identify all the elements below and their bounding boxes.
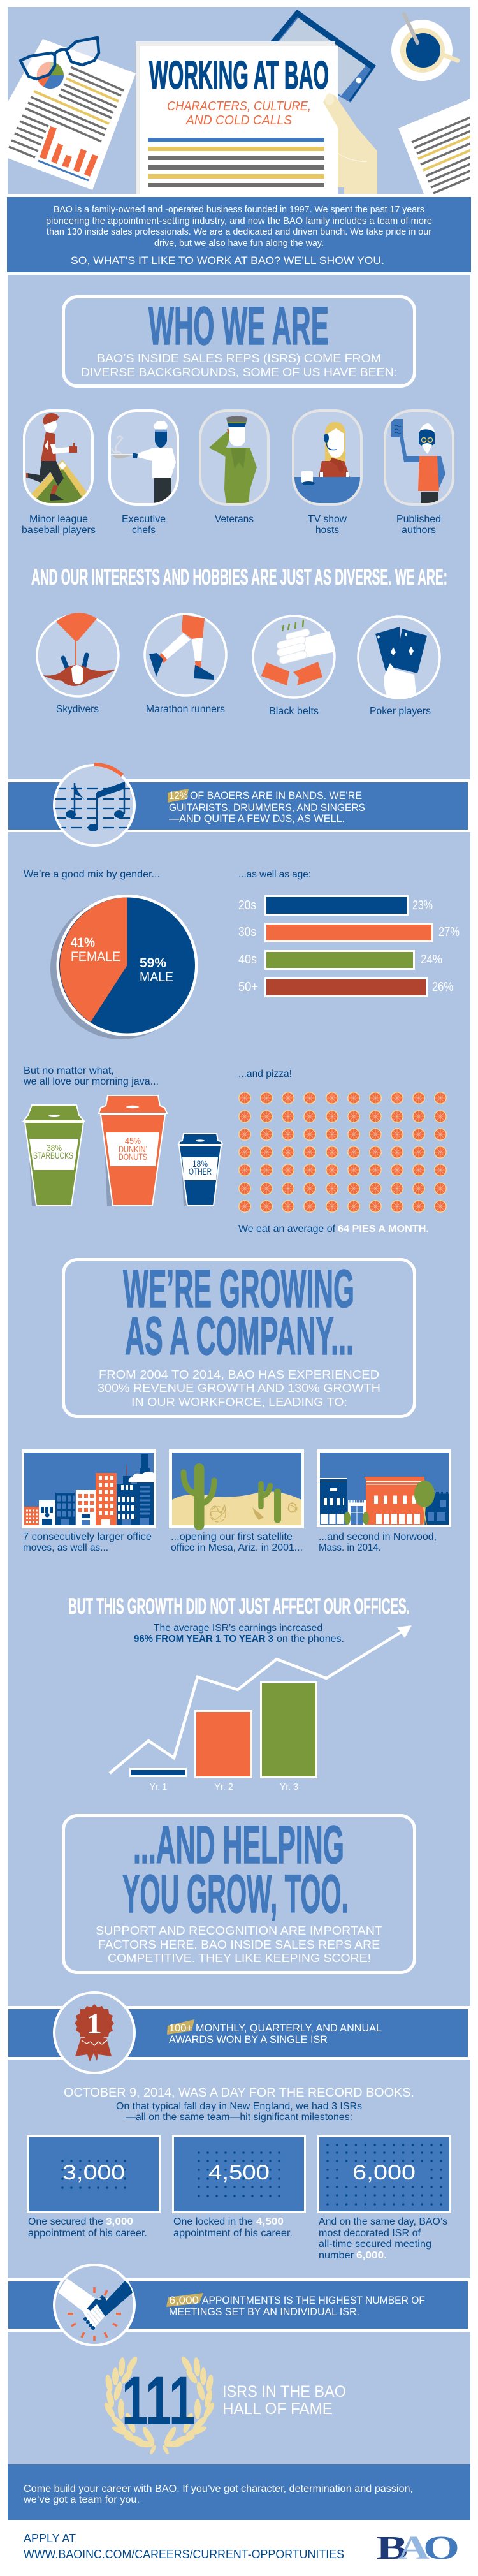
text: record day intro: —all on the same team—hit significant milestones: xyxy=(126,2112,352,2123)
text: hobby labels: Poker players xyxy=(370,706,431,717)
icon: poker cards xyxy=(358,617,440,699)
text: pizza stat: 64 PIES A MONTH. xyxy=(338,1224,429,1234)
bar chart: age: 27% xyxy=(438,925,460,939)
text: hobby labels: Black belts xyxy=(269,706,319,717)
stat highlight xyxy=(168,789,189,803)
text: gender intro: We’re a good mix by gender... xyxy=(24,869,160,880)
icon: coffee cup starbucks 38%: STARBUCKS xyxy=(33,1150,73,1160)
heading subtext: BAO’S INSIDE SALES REPS (ISRS) COME FROM xyxy=(97,351,381,365)
text: earnings xyxy=(134,1623,344,1644)
stat text: GUITARISTS, DRUMMERS, AND SINGERS xyxy=(169,801,365,814)
text: background labels: TV show xyxy=(308,514,347,525)
pie chart: gender: MALE xyxy=(140,970,173,984)
panel: appointments band xyxy=(8,2265,468,2345)
text: background labels: Minor league xyxy=(29,514,88,525)
panel: background hall of fame xyxy=(8,2332,470,2464)
text: background labels: hosts xyxy=(315,525,339,536)
pie chart: gender: 41% xyxy=(71,935,95,950)
intro paragraph: BAO is a family-owned and -operated business founded in 1997. We spent the past 17 years xyxy=(54,205,424,215)
icon: left report page with pie and bar chart xyxy=(0,39,136,190)
panel: background records xyxy=(8,2060,470,2278)
text: milestone captions: One locked in the xyxy=(173,2216,253,2227)
bar chart: age: 20s xyxy=(238,898,256,912)
arrow: rising trend line xyxy=(110,1625,412,1773)
icon: coffee cup dunkin donuts 45%: DONUTS xyxy=(119,1152,147,1162)
text: coffee intro: But no matter what, xyxy=(24,1065,114,1076)
heading subtext: COMPETITIVE. THEY LIKE KEEPING SCORE! xyxy=(108,1951,371,1965)
stat text: MONTHLY, QUARTERLY, AND ANNUAL xyxy=(196,2022,382,2034)
intro paragraph: drive, but we also have fun along the way. xyxy=(154,238,324,249)
subtitle xyxy=(168,101,310,124)
icon: veteran saluting xyxy=(200,411,268,504)
stat text: APPOINTMENTS IS THE HIGHEST NUMBER OF xyxy=(202,2294,425,2306)
text: background labels: chefs xyxy=(132,525,156,536)
text: office captions: office in Mesa, Ariz. in 2001... xyxy=(171,1542,303,1553)
icon: hand holding paper xyxy=(323,93,377,194)
bar chart: age: 26% xyxy=(432,980,453,994)
stat text xyxy=(169,2022,382,2045)
panel: closing band: we’ve got a team for you. xyxy=(23,2494,140,2505)
intro paragraph xyxy=(46,205,432,249)
stat text xyxy=(169,2294,425,2318)
text: hall of fame: HALL OF FAME xyxy=(222,2400,333,2418)
heading subtext: SUPPORT AND RECOGNITION ARE IMPORTANT xyxy=(96,1924,382,1937)
icon: first place ribbon: 1 xyxy=(86,2007,102,2040)
text: hobby labels: Marathon runners xyxy=(146,704,225,715)
heading xyxy=(123,1259,354,1366)
text: background labels: Published xyxy=(396,514,441,525)
panel: growing as a company heading box xyxy=(64,1259,414,1417)
pie chart: gender: 59% xyxy=(140,956,166,970)
text: office captions xyxy=(23,1532,437,1553)
stat text xyxy=(169,789,365,824)
stat text: —AND QUITE A FEW DJS, AS WELL. xyxy=(169,812,345,824)
panel: music band xyxy=(8,765,468,845)
logo: BAO: A xyxy=(398,2530,430,2566)
icon: chef xyxy=(110,411,178,504)
text: background labels: authors xyxy=(402,525,436,536)
text: background labels xyxy=(22,514,441,536)
stat text: 100+ xyxy=(169,2022,192,2034)
intro paragraph: pioneering the appointment-setting industry, and now the BAO family includes a team of more xyxy=(46,216,432,226)
panel: hero desk scene xyxy=(0,7,478,194)
icon: marathon runner xyxy=(145,614,226,696)
big number 111: 111 xyxy=(122,2362,195,2439)
icon: right report page xyxy=(398,99,470,194)
icon: tablet xyxy=(268,10,376,103)
heading subtext xyxy=(81,351,397,379)
bar chart: age: 30s xyxy=(238,925,256,939)
icon: published author xyxy=(385,411,453,506)
heading subtext xyxy=(98,1368,380,1409)
text: coffee intro: we all love our morning java... xyxy=(23,1076,159,1087)
stat text: AWARDS WON BY A SINGLE ISR xyxy=(169,2033,328,2045)
icon: coffee cup dunkin donuts 45% xyxy=(99,1095,167,1206)
logo: BAO: O xyxy=(423,2530,460,2566)
text: office captions: 7 consecutively larger office xyxy=(23,1532,152,1542)
text: earnings: 96% FROM YEAR 1 TO YEAR 3 xyxy=(134,1634,273,1644)
icon: coffee cup dunkin donuts 45%: 45% xyxy=(125,1136,141,1146)
subtitle: AND COLD CALLS xyxy=(185,113,293,128)
panel: 6,000 milestone xyxy=(319,2136,450,2213)
icon: coffee cup xyxy=(391,14,458,81)
panel: intro band xyxy=(7,197,471,272)
text: milestone captions: number xyxy=(319,2250,354,2261)
icon: skydiver xyxy=(37,613,119,696)
bar chart: earnings by year: Yr. 1 xyxy=(150,1782,167,1792)
icon: coffee cup other 18%: 18% xyxy=(192,1159,208,1169)
illustration: Norwood office xyxy=(317,1449,451,1527)
text: milestone captions: all-time secured meeting xyxy=(319,2239,431,2250)
heading: record day: OCTOBER 9, 2014, WAS A DAY FOR THE RECORD BOOKS. xyxy=(64,2086,414,2100)
panel: 4,500 milestone xyxy=(173,2136,305,2213)
bar chart: age: 50+ xyxy=(238,980,258,994)
bar chart: age: 23% xyxy=(412,898,433,912)
text: apply at: WWW.BAOINC.COM/CAREERS/CURRENT-OPPORTUNITIES xyxy=(24,2548,344,2561)
heading subtext: DIVERSE BACKGROUNDS, SOME OF US HAVE BEEN: xyxy=(81,365,397,379)
icon grid: pizzas xyxy=(238,1092,447,1213)
text: background labels: Veterans xyxy=(215,514,254,525)
stat text: 6,000 xyxy=(169,2294,199,2306)
intro paragraph: than 130 inside sales professionals. We are a dedicated and driven bunch. We take pride in our xyxy=(47,227,431,237)
icon: coffee cup other 18% xyxy=(178,1134,222,1206)
text: hobby labels: Skydivers xyxy=(56,704,99,715)
pie chart: gender xyxy=(50,895,198,1039)
text: pizza intro: ...and pizza! xyxy=(238,1069,292,1079)
logo: BAO: B xyxy=(376,2530,408,2566)
bar chart: age: 40s xyxy=(238,953,257,967)
panel: paper stack xyxy=(136,41,338,194)
text: milestone captions: 3,000 xyxy=(106,2216,133,2227)
stat highlight xyxy=(166,2293,203,2307)
text: milestone captions: 6,000. xyxy=(356,2250,387,2261)
intro call line: SO, WHAT’S IT LIKE TO WORK AT BAO? WE’LL SHOW YOU. xyxy=(71,254,384,267)
panel: background stats and growth xyxy=(8,832,470,2006)
icon: black belt breaking board xyxy=(253,616,335,698)
heading xyxy=(122,1815,349,1924)
icon: first place ribbon xyxy=(54,1993,134,2073)
text: hall of fame: ISRS IN THE BAO xyxy=(222,2383,346,2401)
decorative text lines on paper xyxy=(148,138,324,187)
panel: closing band: Come build your career with BAO. If you’ve got character, determination and passion, xyxy=(24,2484,413,2494)
text: office captions: Mass. in 2014. xyxy=(319,1542,381,1553)
text: background labels: baseball players xyxy=(22,525,96,536)
icon: tv show host xyxy=(292,411,363,508)
bar chart: age xyxy=(238,896,460,996)
panel: background who we are xyxy=(8,275,470,779)
text: milestone captions: One secured the xyxy=(28,2216,103,2227)
icon: handshake xyxy=(54,2265,135,2345)
panel: helping you grow heading box xyxy=(64,1815,414,1973)
heading subtext: FROM 2004 TO 2014, BAO HAS EXPERIENCED xyxy=(99,1368,379,1381)
icon: music notes badge xyxy=(54,765,134,845)
icon: coffee cup starbucks 38% xyxy=(24,1105,84,1206)
illustration: desert Mesa office xyxy=(169,1449,304,1528)
text: office captions: moves, as well as... xyxy=(23,1542,108,1553)
text: apply at: APPLY AT xyxy=(24,2532,76,2545)
icon: laurel wreath xyxy=(103,2355,216,2455)
text: milestone captions: And on the same day, BAO’s xyxy=(319,2216,447,2227)
text: milestone captions: appointment of his career. xyxy=(173,2228,293,2239)
icon: baseball player xyxy=(22,411,96,504)
pie chart: gender: FEMALE xyxy=(71,949,120,964)
text: record day intro: On that typical fall day in New England, we had 3 ISRs xyxy=(116,2101,362,2112)
illustration: city office moves xyxy=(22,1449,156,1528)
panel: 3,000 milestone xyxy=(28,2136,159,2213)
text: office captions: ...opening our first satellite xyxy=(171,1532,293,1542)
text: hall of fame xyxy=(222,2383,346,2418)
heading subtext: IN OUR WORKFORCE, LEADING TO: xyxy=(131,1395,347,1409)
text: earnings: on the phones. xyxy=(277,1634,344,1644)
stat text: MEETINGS SET BY AN INDIVIDUAL ISR. xyxy=(169,2306,359,2318)
text: milestone captions: most decorated ISR of xyxy=(319,2228,421,2239)
text: record day intro xyxy=(116,2101,362,2123)
text: pizza stat xyxy=(238,1224,429,1234)
panel: 6,000 milestone: 6,000 xyxy=(352,2161,416,2184)
panel: closing band xyxy=(8,2464,470,2520)
subtitle: CHARACTERS, CULTURE, xyxy=(167,99,311,113)
stat highlight xyxy=(167,2019,194,2035)
text: pizza stat: We eat an average of xyxy=(238,1224,336,1234)
stat text: 12% xyxy=(169,789,188,801)
text: earnings: The average ISR’s earnings increased xyxy=(154,1623,322,1634)
text: coffee intro xyxy=(23,1065,159,1087)
icon: coffee cup other 18%: OTHER xyxy=(189,1166,212,1176)
bar chart: earnings by year xyxy=(130,1682,316,1792)
text: age intro: ...as well as age: xyxy=(238,869,311,880)
heading subtext: 300% REVENUE GROWTH AND 130% GROWTH xyxy=(98,1381,380,1394)
text: milestone captions xyxy=(28,2216,447,2261)
panel: 4,500 milestone: 4,500 xyxy=(208,2161,270,2184)
stat text: OF BAOERS ARE IN BANDS. WE’RE xyxy=(190,789,362,801)
text: apply at xyxy=(24,2532,344,2561)
heading subtext xyxy=(96,1924,382,1965)
text: background labels: Executive xyxy=(122,514,166,525)
text: office captions: ...and second in Norwood, xyxy=(319,1532,437,1542)
text: milestone captions: appointment of his career. xyxy=(28,2228,147,2239)
icon: glasses xyxy=(20,38,99,79)
heading subtext: FACTORS HERE. BAO INSIDE SALES REPS ARE xyxy=(98,1938,380,1951)
icon: coffee cup starbucks 38%: 38% xyxy=(47,1143,62,1153)
panel: who we are heading box xyxy=(64,296,414,386)
bar chart: earnings by year: Yr. 2 xyxy=(214,1782,233,1792)
icon: coffee cup dunkin donuts 45%: DUNKIN’ xyxy=(119,1144,147,1154)
bar chart: earnings by year: Yr. 3 xyxy=(280,1782,298,1792)
text: milestone captions: 4,500 xyxy=(256,2216,284,2227)
panel: awards band xyxy=(8,1993,468,2073)
text: hobby labels xyxy=(56,704,431,717)
bar chart: age: 24% xyxy=(421,953,442,967)
logo: BAO xyxy=(376,2530,460,2566)
panel: 3,000 milestone: 3,000 xyxy=(62,2161,125,2184)
